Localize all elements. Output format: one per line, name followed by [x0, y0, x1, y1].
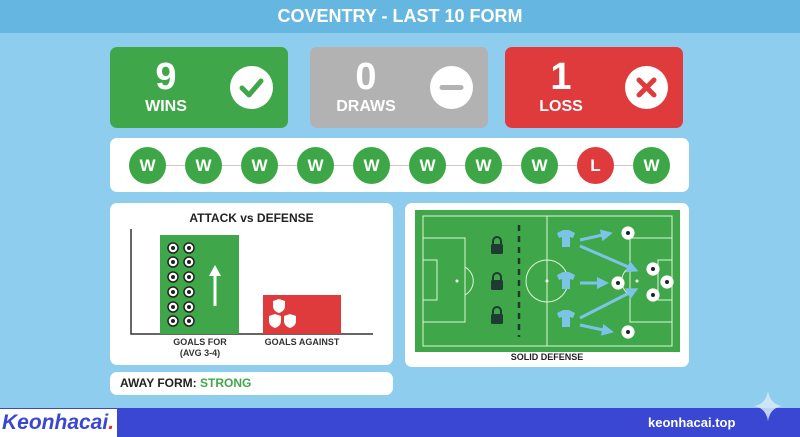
form results: W	[195, 156, 212, 175]
form results: W	[419, 156, 436, 175]
icon: minus	[430, 66, 473, 109]
label: goals for	[173, 337, 227, 358]
icon: sparkle	[754, 392, 782, 421]
panel: pitch	[405, 203, 689, 367]
pitch diagram	[415, 210, 680, 352]
logo: Keonhacai.	[2, 411, 114, 434]
bar chart	[130, 229, 373, 335]
card: wins: WINS	[145, 98, 187, 115]
form strip	[110, 138, 689, 192]
form results: W	[251, 156, 268, 175]
label: goals against: GOALS AGAINST	[265, 337, 339, 347]
away form box: AWAY FORM: STRONG	[120, 376, 251, 390]
chart heading: ATTACK vs DEFENSE	[189, 211, 314, 225]
form results: W	[475, 156, 492, 175]
card: loss: LOSS	[539, 98, 583, 115]
icon: check	[230, 66, 273, 109]
caption: SOLID DEFENSE	[511, 352, 583, 362]
form results: L	[590, 156, 601, 175]
panel: attack vs defense	[110, 203, 393, 365]
card: wins	[110, 47, 288, 128]
form results: W	[307, 156, 324, 175]
form results	[129, 147, 670, 184]
title bar	[0, 0, 800, 33]
card: loss: 1	[550, 56, 572, 98]
card: wins: 9	[155, 56, 177, 98]
form results: W	[363, 156, 380, 175]
away form box	[110, 372, 393, 395]
card: draws: 0	[355, 56, 377, 98]
label: goals for: (AVG 3-4)	[180, 348, 220, 358]
form results: W	[643, 156, 660, 175]
card: draws: DRAWS	[336, 98, 396, 115]
site url: keonhacai.top	[648, 415, 735, 430]
form results: W	[139, 156, 156, 175]
card: loss	[505, 47, 683, 128]
label: goals for: GOALS FOR	[173, 337, 227, 347]
footer	[0, 408, 800, 437]
icon: cross	[625, 66, 668, 109]
form results: W	[531, 156, 548, 175]
card: draws	[310, 47, 488, 128]
title bar: COVENTRY - LAST 10 FORM	[277, 6, 523, 26]
